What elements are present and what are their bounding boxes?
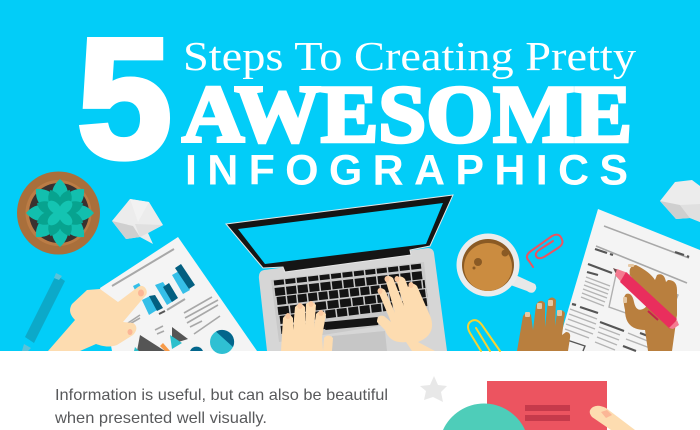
icon: pen: [22, 273, 65, 351]
panel: newspaper document: [556, 209, 700, 351]
title: number 5: 5: [77, 4, 172, 194]
icon: star: [420, 376, 447, 402]
icon: yellow paperclip: [468, 320, 500, 351]
intro text: when presented well visually.: [54, 410, 267, 427]
title: steps to creating pretty: Steps To Creating Pretty: [183, 33, 637, 79]
icon: potted plant: [17, 172, 100, 254]
text lines: [116, 297, 220, 334]
newspaper headings: [572, 249, 689, 351]
newspaper header lines: [596, 226, 689, 283]
intro text: Information is useful, but can also be beautiful: [55, 387, 388, 404]
icon: laptop: [226, 195, 453, 351]
icon: typing hand right: [377, 276, 435, 351]
icon: crumpled paper left: [112, 199, 163, 244]
illustration: red card with hand: [443, 381, 635, 430]
icon: red paperclip: [527, 235, 562, 267]
title: awesome: AWESOME: [182, 68, 632, 160]
icon: hand holding pencil: [623, 264, 677, 351]
newspaper text columns: [565, 277, 650, 350]
icon: crumpled paper right: [660, 180, 700, 222]
pie chart: [190, 330, 234, 354]
icon: coffee cup: [456, 234, 536, 296]
laptop base: [259, 248, 447, 351]
icon: brown hand on paper: [517, 298, 570, 351]
panel: chart document: [100, 237, 257, 354]
title: infographics: INFOGRAPHICS: [185, 146, 628, 194]
bar chart: [133, 264, 195, 315]
icon: pink pencil: [613, 268, 679, 329]
newspaper image box: [609, 270, 678, 327]
trackpad: [332, 331, 387, 351]
icon: typing hand left: [281, 301, 333, 351]
laptop screen: [226, 195, 453, 272]
intro text: [54, 387, 388, 427]
triangle chart: [134, 327, 188, 351]
icon: pointing hand: [48, 286, 147, 351]
keyboard: [274, 266, 427, 330]
